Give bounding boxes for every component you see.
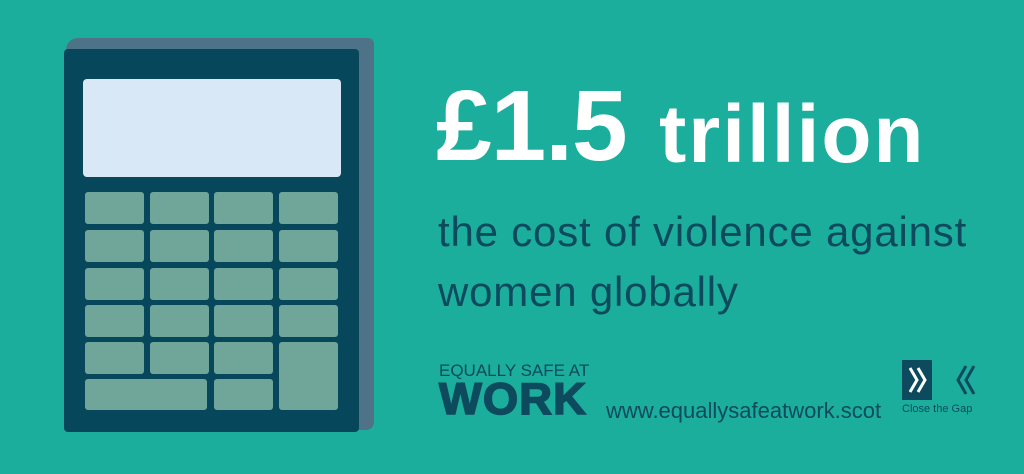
logo: Close the Gap: [902, 360, 976, 415]
description text: the cost of violence against: [438, 208, 967, 255]
keypad: [85, 192, 338, 410]
calculator body: [64, 49, 359, 432]
headline figure: trillion: [659, 89, 926, 180]
description text: women globally: [438, 268, 739, 315]
description text: [438, 208, 967, 315]
icon: chevrons: [902, 360, 976, 400]
calculator icon: [64, 38, 374, 432]
headline figure: £1.5: [436, 70, 627, 182]
screen: [83, 79, 341, 177]
logo: Equally Safe at Work: EQUALLY SAFE AT: [439, 361, 589, 380]
headline figure: [436, 70, 926, 182]
logo: Equally Safe at Work: WORK: [439, 374, 587, 423]
logo text: Close the Gap: [902, 403, 972, 415]
website url: www.equallysafeatwork.scot: [606, 398, 881, 423]
calculator shadow: [66, 38, 374, 430]
